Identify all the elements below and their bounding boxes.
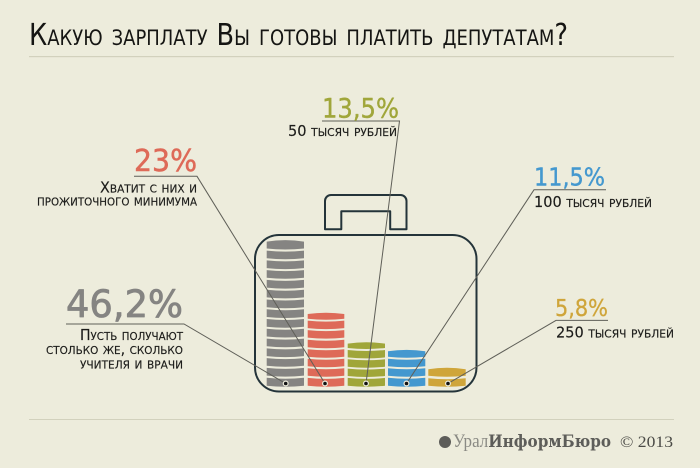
label: 23%: 23%	[134, 144, 197, 179]
label: 23%	[37, 144, 197, 210]
coin stack: green, 13.5%	[348, 342, 385, 387]
leader lines	[66, 121, 608, 384]
label: 23%: Хватит с них и	[100, 178, 197, 196]
label: 5,8%	[555, 296, 674, 342]
coin stack: blue, 11.5%	[388, 350, 425, 387]
leader line end dots	[283, 381, 450, 386]
label: 23%: прожиточного минимума	[37, 192, 197, 210]
label: 46,2%	[46, 283, 183, 372]
label: 11,5%	[534, 162, 652, 211]
coin stack: grey, 46.2%	[267, 240, 304, 387]
label: 11,5%: 100 тысяч рублей	[534, 193, 652, 211]
label: 5,8%: 5,8%	[555, 296, 608, 322]
label: 46,2%: 46,2%	[66, 283, 183, 326]
label: 13,5%	[288, 94, 399, 140]
label: 46,2%: учителя и врачи	[80, 354, 183, 372]
label: 13,5%: 13,5%	[322, 94, 399, 124]
label: 11,5%: 11,5%	[534, 162, 605, 192]
label: 46,2%: Пусть получают	[80, 326, 183, 344]
briefcase	[255, 195, 476, 392]
copyright: © 2013	[620, 434, 673, 451]
title: Какую зарплату Вы готовы платить депутатам?	[29, 18, 568, 53]
coin stack: red, 23%	[308, 313, 344, 387]
coin stack: yellow, 5.8%	[428, 368, 466, 387]
label: 5,8%: 250 тысяч рублей	[556, 324, 674, 342]
footer logo: УралИнформБюро	[453, 431, 611, 452]
label: 13,5%: 50 тысяч рублей	[288, 122, 397, 140]
label: 46,2%: столько же, сколько	[46, 340, 183, 358]
